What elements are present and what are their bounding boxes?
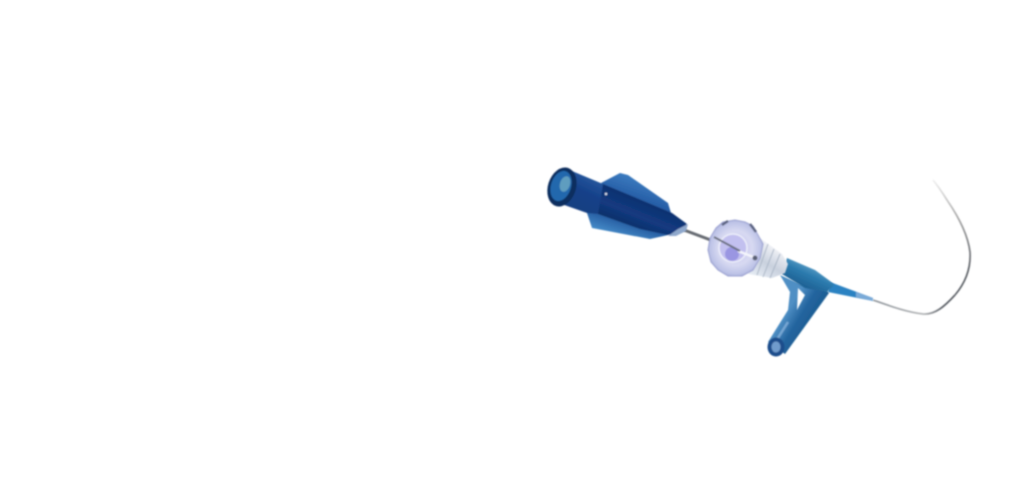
guide wire — [873, 180, 970, 314]
side arm — [768, 275, 829, 356]
valve hub — [708, 220, 763, 276]
bottom wing — [587, 212, 668, 239]
needle shaft — [684, 230, 740, 251]
side arm port — [768, 338, 784, 356]
transparent collar — [748, 238, 788, 278]
blue sheath tube — [828, 282, 873, 301]
syringe dilator hub — [543, 164, 688, 239]
barrel — [553, 171, 610, 215]
barrel cap — [543, 164, 581, 210]
tip highlight — [668, 224, 688, 236]
top wing — [601, 173, 671, 213]
sheath body — [782, 258, 834, 292]
cap inner — [547, 168, 575, 204]
barrel core — [598, 184, 687, 235]
